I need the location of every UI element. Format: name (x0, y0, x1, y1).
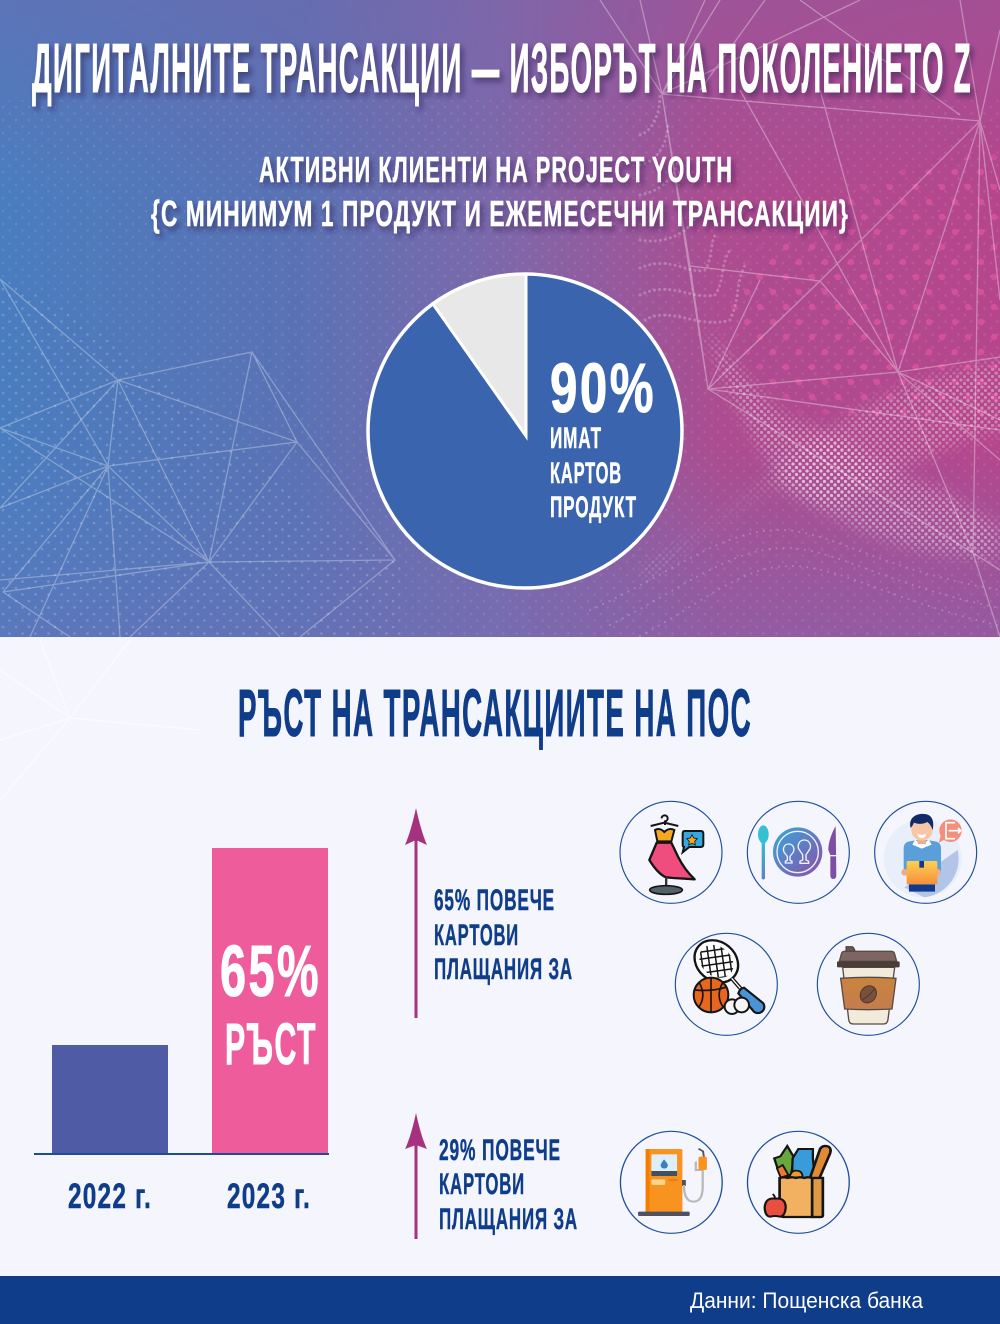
bar: 2023 (212, 848, 328, 1153)
label: 2023: 2023 г. (227, 1177, 311, 1216)
text: 29% more card payments (439, 1134, 578, 1236)
source credit: Данни: Пощенска банка (690, 1288, 924, 1313)
text: 29% more card payments: 29% ПОВЕЧЕ (439, 1134, 561, 1167)
pie chart: 90% card product: КАРТОВ (550, 457, 622, 490)
text: 29% more card payments: КАРТОВИ (439, 1168, 525, 1201)
icon: restaurant (747, 801, 849, 903)
label: 65% growth: 65% (220, 932, 321, 1012)
pie chart: 90% card product (368, 274, 682, 588)
panel: top gradient background (0, 0, 1000, 637)
icon: clothing (620, 801, 722, 903)
label: 65% growth: РЪСТ (225, 1012, 317, 1077)
text: 65% more card payments (434, 884, 573, 986)
text: 65% more card payments: ПЛАЩАНИЯ ЗА (434, 953, 573, 986)
icon: online shopping (875, 801, 977, 903)
arrow: 65% up (405, 808, 427, 1018)
subtitle (151, 149, 849, 234)
icon: fuel pump (620, 1131, 722, 1233)
pie chart: 90% card product: ИМАТ (550, 422, 602, 455)
pie chart: 90% card product: 90% (550, 349, 656, 427)
icon: groceries (747, 1131, 849, 1233)
bar chart (34, 848, 329, 1216)
label: 65% growth (220, 932, 321, 1077)
text: 65% more card payments: 65% ПОВЕЧЕ (434, 884, 555, 917)
panel: lower light background (0, 637, 1000, 1276)
arrow: 29% up (405, 1113, 427, 1239)
text: 65% more card payments: КАРТОВИ (434, 919, 519, 952)
footer bar (0, 1276, 1000, 1324)
icon: coffee (817, 933, 919, 1035)
icon: sports (675, 932, 777, 1035)
bar: 2022 (52, 1045, 168, 1153)
label: 2022: 2022 г. (68, 1177, 152, 1216)
text: 29% more card payments: ПЛАЩАНИЯ ЗА (439, 1203, 578, 1236)
pie chart: 90% card product: ПРОДУКТ (550, 491, 637, 524)
